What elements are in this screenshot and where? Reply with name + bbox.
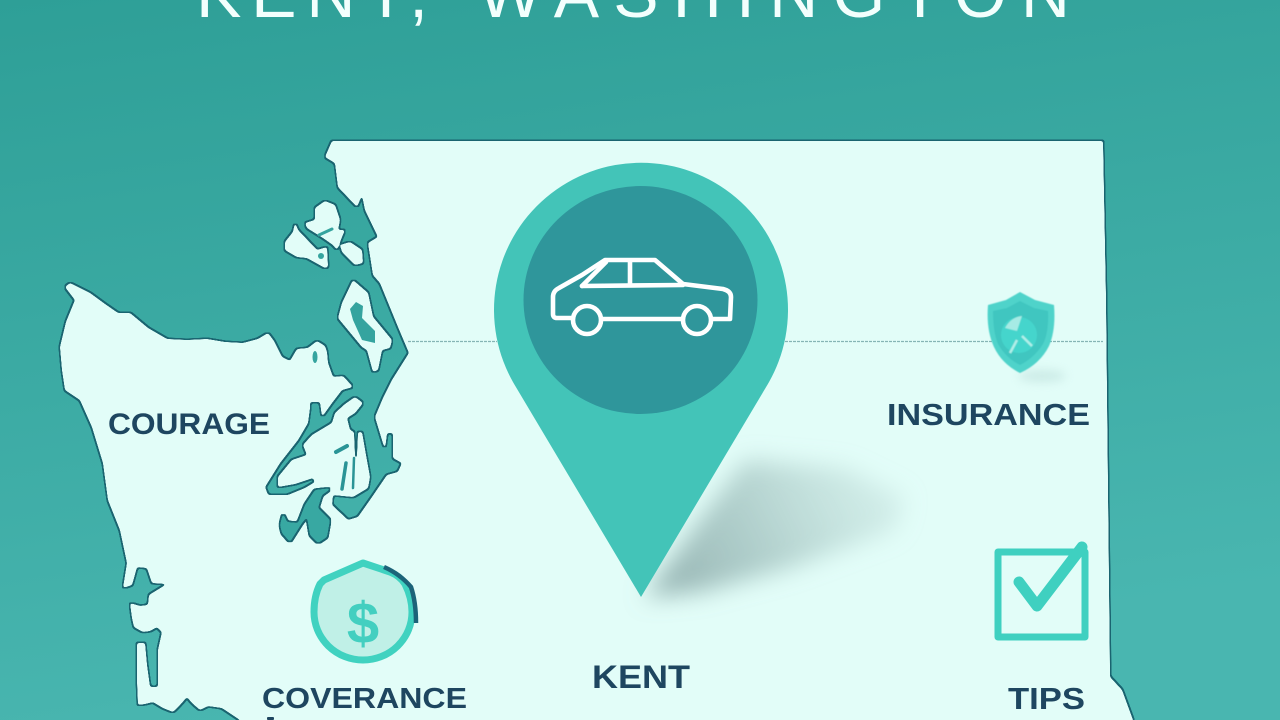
label: courage: COURAGE — [108, 408, 270, 441]
icon: coverage dollar badge: $ — [347, 591, 379, 656]
label: kent: KENT — [592, 659, 691, 695]
latitude line right — [785, 340, 1103, 342]
icon: car — [553, 260, 731, 334]
label: insurance: INSURANCE — [887, 397, 1090, 432]
label: coverance: COVERANCE — [262, 683, 467, 715]
label: tips: TIPS — [1008, 681, 1085, 716]
island lakes — [312, 229, 332, 363]
land mass — [60, 141, 1136, 720]
San Juan islands — [285, 201, 363, 268]
icon: checkbox — [998, 547, 1085, 637]
southern Puget Sound inlet — [280, 488, 332, 543]
Sound channels — [336, 446, 354, 489]
shield icon shadow — [1018, 370, 1066, 382]
pin body — [494, 163, 788, 597]
icon: coverage dollar badge — [314, 563, 416, 660]
title — [196, 0, 1070, 32]
latitude line left — [408, 340, 497, 342]
map of Washington state — [60, 141, 1136, 720]
icon: insurance shield — [988, 292, 1054, 373]
location pin with car — [494, 163, 788, 597]
pin inner circle — [524, 186, 758, 414]
Camano inlet — [350, 302, 375, 343]
Whidbey island — [338, 280, 392, 372]
pin shadow — [645, 460, 906, 597]
